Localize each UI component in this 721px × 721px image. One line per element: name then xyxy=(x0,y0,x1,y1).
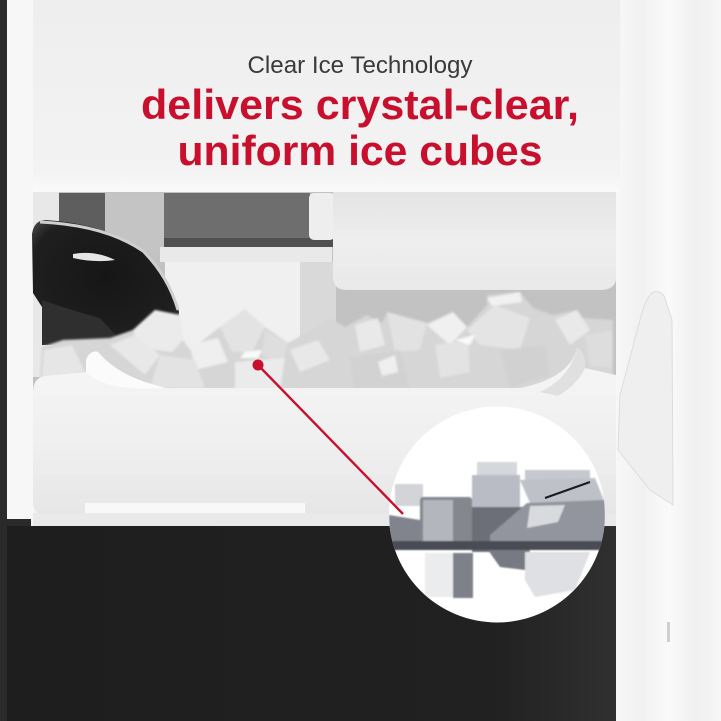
callout line xyxy=(252,360,403,514)
headline: uniform ice cubes xyxy=(178,127,542,174)
dark lower panel xyxy=(7,526,616,721)
ice maker housing xyxy=(309,192,616,290)
ice bin xyxy=(33,348,616,526)
headline xyxy=(141,81,579,174)
headline: delivers crystal-clear, xyxy=(141,81,579,128)
title xyxy=(141,52,579,174)
dispenser recess xyxy=(33,192,616,392)
left door edge xyxy=(0,0,33,721)
magnified ice cube circle xyxy=(389,406,606,622)
subtitle: Clear Ice Technology xyxy=(248,52,472,79)
ice scoop xyxy=(32,220,179,345)
right door frame xyxy=(616,0,721,721)
upper white panel xyxy=(33,0,620,192)
ice cubes xyxy=(40,292,613,392)
